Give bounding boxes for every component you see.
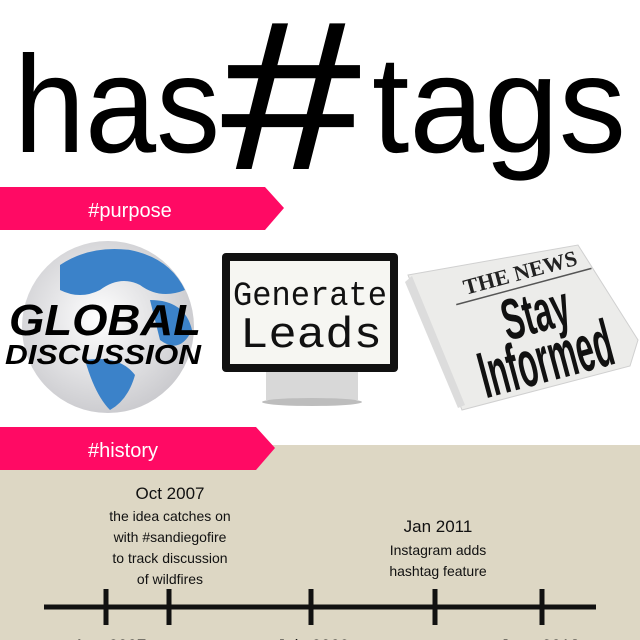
event: Oct 2007: to track discussion [112,550,228,566]
icon: monitor generate leads: Generate [233,278,387,316]
icon: newspaper stay informed [405,242,638,412]
icon: global discussion globe: GLOBAL [9,296,201,345]
icon: newspaper stay informed: Stay [494,273,577,353]
banner: history [0,427,275,470]
icon: monitor generate leads: Leads [240,311,382,361]
icon: newspaper stay informed: THE NEWS [461,245,580,300]
history background [0,445,640,640]
event: Jan 2011: Jan 2011 [404,517,472,536]
title [14,0,626,213]
icon: monitor generate leads [222,253,398,406]
event: Jan 2011 [389,517,487,579]
event: Oct 2007: the idea catches on [109,508,231,524]
event: Oct 2007: with #sandiegofire [113,529,227,545]
event: Jan 2011: hashtag feature [389,563,487,579]
event: Jan 2011: Instagram adds [390,542,486,558]
event: Oct 2007: Oct 2007 [136,484,204,503]
timeline [44,589,596,625]
event: Oct 2007 [109,484,231,587]
timeline labels [74,636,580,640]
icon: global discussion globe: DISCUSSION [5,339,202,370]
banner: purpose: #purpose [88,200,172,222]
title: has [14,28,220,182]
icon: global discussion globe [5,241,202,413]
banner: purpose [0,187,284,230]
title: tags [372,28,626,182]
event: Oct 2007: of wildfires [137,571,203,587]
banner: history: #history [88,440,158,462]
